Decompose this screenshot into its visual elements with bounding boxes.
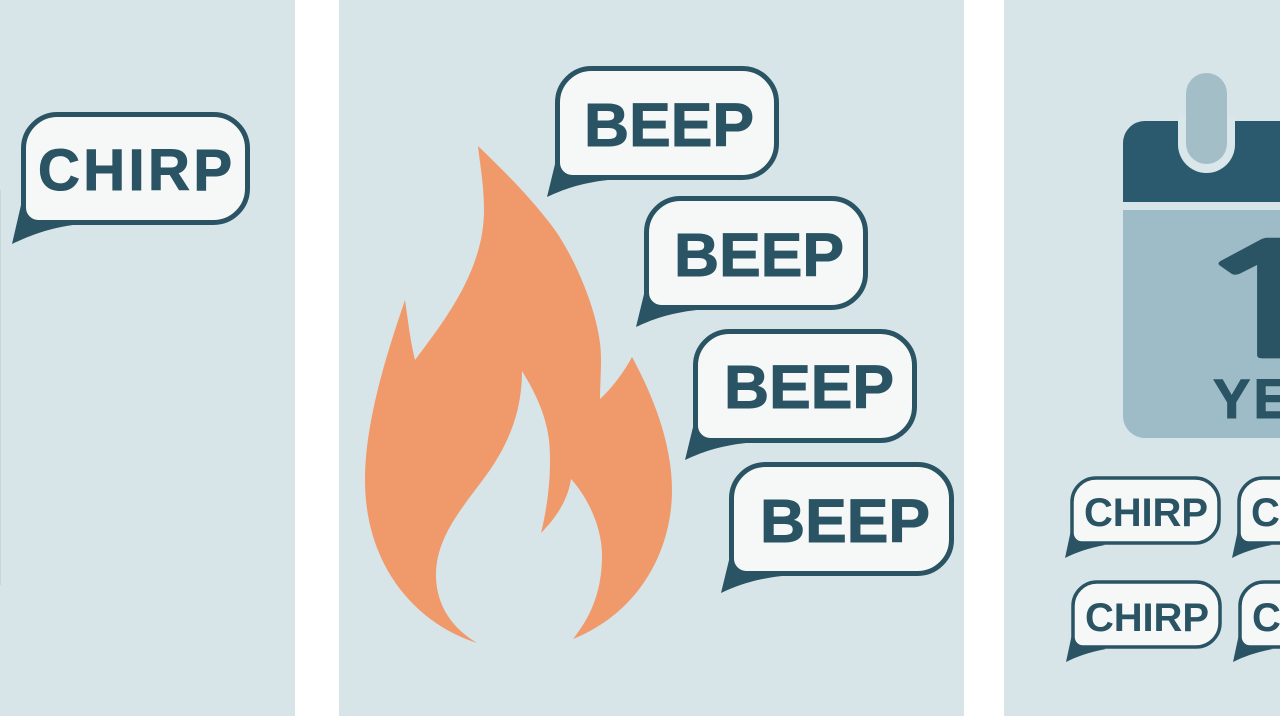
speech bubble: chirp — [12, 114, 248, 244]
speech bubble: small chirp row 1 column 2 — [1232, 478, 1280, 558]
panel: left — [0, 0, 295, 716]
speech bubble: beep 4 — [721, 464, 952, 593]
speech bubble: beep 3 — [685, 332, 914, 460]
icon: flame — [365, 146, 672, 643]
speech bubble: beep 2 — [636, 198, 866, 327]
speech bubble: small chirp row 1 column 1 — [1065, 478, 1219, 558]
speech bubble: small chirp row 1 column 1: CHIRP — [1084, 491, 1208, 535]
panel: right — [1004, 0, 1280, 716]
speech bubble: beep 4: BEEP — [760, 487, 930, 555]
speech bubble: small chirp row 2 column 1 — [1066, 582, 1220, 662]
panel: middle — [339, 0, 964, 716]
speech bubble: beep 1 — [547, 68, 776, 197]
icon: calendar one year — [1123, 73, 1280, 438]
speech bubble: small chirp row 2 column 2 — [1233, 582, 1280, 662]
speech bubble: chirp: CHIRP — [38, 138, 232, 203]
speech bubble: beep 1: BEEP — [584, 91, 754, 159]
speech bubble: beep 2: BEEP — [674, 221, 844, 289]
speech bubble: small chirp row 2 column 1: CHIRP — [1085, 596, 1209, 640]
speech bubble: beep 3: BEEP — [724, 353, 894, 421]
